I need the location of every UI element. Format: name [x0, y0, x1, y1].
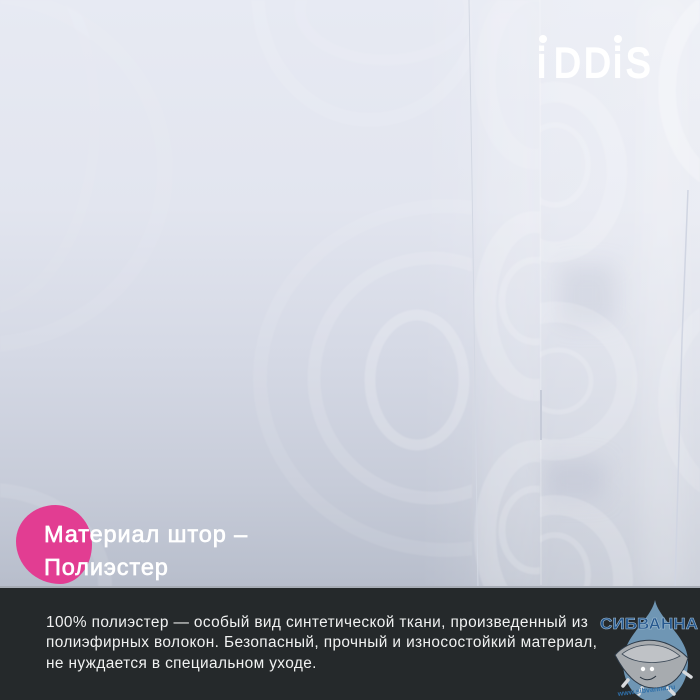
bathtub	[615, 640, 691, 694]
heading: Полиэстер	[44, 554, 169, 580]
description text: не нуждается в специальном уходе.	[46, 655, 317, 672]
watermark logo: Сибванна	[600, 600, 698, 700]
url: www.sibvanna.ru	[616, 684, 676, 698]
description text: полиэфирных волокон. Безопасный, прочный и износостойкий материал,	[46, 634, 597, 651]
brand name: СИБВАННА	[600, 616, 698, 633]
heading: Материал штор –	[44, 521, 248, 547]
description text: 100% полиэстер — особый вид синтетической ткани, произведенный из	[46, 614, 588, 631]
water drop	[623, 600, 688, 700]
description text	[46, 614, 597, 672]
curtain seams	[469, 0, 688, 590]
heading	[44, 521, 248, 580]
footer bar	[0, 588, 700, 700]
pink accent blob	[16, 505, 92, 584]
